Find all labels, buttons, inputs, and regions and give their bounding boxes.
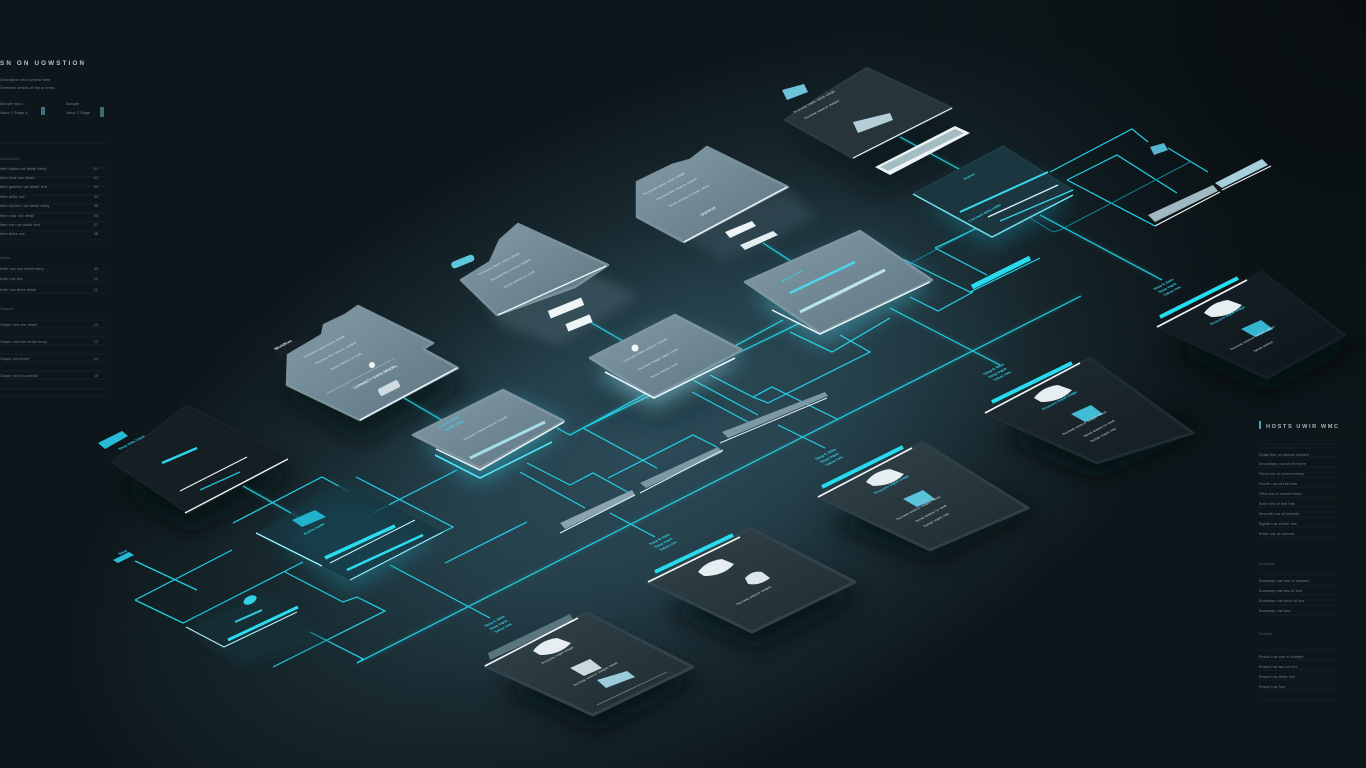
panel: upper left light card <box>272 306 458 420</box>
right text column: Fourth row of text line <box>1259 482 1297 486</box>
right text column: Result row one of content <box>1259 655 1304 659</box>
panel: card fourth: Review source output value <box>1061 410 1108 435</box>
left text column: Sample <box>66 102 79 106</box>
right text column: Summary <box>1259 562 1275 566</box>
left text column: Item beta row detail <box>0 176 35 180</box>
panel: card bottom: Step A data <box>482 615 507 627</box>
panel: top dark card: Review source output <box>803 99 841 119</box>
panel: glowing card three <box>745 231 932 345</box>
panel: top dark card: Process input value stage <box>792 90 836 113</box>
panel: card fourth: Step D data <box>981 362 1006 375</box>
panel: teal outlined card <box>256 482 443 590</box>
left text column: Overview details of the process <box>0 86 55 90</box>
panel: left dark card <box>98 405 290 513</box>
left text column: Item theta row <box>0 232 25 236</box>
panel: card second: Review source output <box>735 585 773 605</box>
left text column: Note row three detail <box>0 288 37 292</box>
panel: card bottom: Review source output value <box>572 661 619 686</box>
left text column: 11 <box>94 288 98 292</box>
panel: glowing card three: Active node <box>779 269 804 282</box>
panel: glowing card two: Review stage input value <box>637 348 680 370</box>
heading: right column: HOSTS UWIR WMC <box>1266 424 1340 430</box>
panel: teal card upper right: Active <box>961 172 977 180</box>
panel: upper light card: Review the source output <box>655 177 699 200</box>
left text column: Sample input <box>0 102 23 106</box>
panel: upper light card <box>637 147 788 250</box>
left text column: Value 2 Stage <box>66 111 90 115</box>
panel: upper left light card: CONNECT DATA MODEL <box>351 364 399 389</box>
label tag: Workflow <box>272 339 294 350</box>
panel: card fourth: Process input stage <box>1040 390 1079 410</box>
right text column: Detail line of column content <box>1259 453 1309 457</box>
panel: upper middle light card: Review the source output <box>489 258 533 281</box>
panel: glowing card two: Connect data source model <box>622 338 669 362</box>
panel: card bottom: Value row <box>492 622 514 633</box>
panel: glowing card three: Connect data source model <box>827 276 874 300</box>
panel: card fifth: Send status <box>1252 341 1274 352</box>
left text column: 02 <box>94 176 98 180</box>
right text column: Result row three line <box>1259 675 1295 679</box>
panel: upper left light card: Review the source output <box>314 341 358 364</box>
panel: upper left light card: Process input value stage <box>302 335 346 358</box>
left text column: 13 <box>94 340 98 344</box>
panel: upper left light card: Send status to next <box>329 352 363 370</box>
panel: card fourth: Send status to next <box>1082 419 1116 437</box>
left text column: Item epsilon row detail entry <box>0 204 50 208</box>
left text column: Item alpha row detail entry <box>0 167 47 171</box>
panel: upper light card: Process input value stage <box>642 172 686 195</box>
right text column: Secondary row of text here <box>1259 462 1306 466</box>
panel: card fifth: Step input <box>1156 282 1179 293</box>
panel: card fourth: Detail input row <box>1089 427 1118 442</box>
heading: left column: SN ON UOWSTION <box>0 60 86 67</box>
panel: upper light card: Send status to next value <box>667 184 711 207</box>
left text column: 07 <box>94 223 98 227</box>
left text column: 14 <box>94 357 98 361</box>
right text column: Summary row two of text <box>1259 589 1302 593</box>
panel: card fifth <box>1151 272 1360 392</box>
right text column: Sixth row of text line <box>1259 502 1295 506</box>
shadows and lower layers of light cards <box>120 100 965 535</box>
panel: card third: Step C data <box>813 447 838 460</box>
left text column: 01 <box>94 167 98 171</box>
left text column: 08 <box>94 232 98 236</box>
panel: glowing card one: Active node <box>436 415 461 428</box>
left text column: 05 <box>94 204 98 208</box>
panel: card third: Value row <box>823 455 845 466</box>
panel: upper middle light card: Send status to next <box>502 270 536 288</box>
panel: card bottom: Step input <box>487 619 510 630</box>
panel: card third: Review source output value <box>895 495 942 520</box>
left text column: 15 <box>94 374 98 378</box>
right text column: Result row four <box>1259 685 1286 689</box>
panel: glowing card one: Detail step <box>442 419 465 431</box>
panel: card second: Step input <box>652 537 675 548</box>
panel: card third <box>813 442 1036 563</box>
right text column <box>1259 421 1340 700</box>
panel: card second <box>647 528 863 650</box>
label tag <box>272 335 310 357</box>
left text column: Item eta row detail text <box>0 223 40 227</box>
right text column: Result row two of text <box>1259 665 1297 669</box>
left text column: Note row one detail entry <box>0 267 44 271</box>
panel: glowing card two <box>590 315 742 410</box>
right text column: Summary row one of content <box>1259 579 1309 583</box>
panel: card fifth: Value row <box>1161 285 1183 296</box>
left text column <box>0 60 108 396</box>
panel: card second: Step B data <box>647 532 672 545</box>
left text column: Item zeta row detail <box>0 214 34 218</box>
panel: card fifth: Process input stage <box>1208 305 1247 325</box>
panel: card fourth <box>981 358 1203 480</box>
panel: teal card lower left: Step <box>116 549 129 555</box>
panel: card third: Step input <box>818 452 841 463</box>
left text column: Note row two <box>0 277 23 281</box>
left text column: Description text content here <box>0 78 50 82</box>
panel: glowing card two: Send status next <box>649 363 679 378</box>
left text column: Outputs <box>0 307 14 311</box>
panel: card fourth: Value row <box>991 370 1013 381</box>
right text column: Results <box>1259 632 1272 636</box>
panel: top dark card <box>782 68 970 175</box>
panel: glowing card one: Connect data source model <box>462 416 509 440</box>
panel: upper middle light card: Process input value stage <box>477 252 521 275</box>
panel: card fifth: Step E data <box>1151 278 1176 290</box>
right text column: Fifth row of content here <box>1259 492 1302 496</box>
panel: card third: Process input stage <box>872 474 911 494</box>
panel: card bottom: Process input stage <box>540 646 575 664</box>
right text column: Summary row three of line <box>1259 599 1305 603</box>
left text column: 03 <box>94 185 98 189</box>
left text column: 12 <box>94 323 98 327</box>
left text column: Notes <box>0 256 10 260</box>
left text column: Section list <box>0 157 19 161</box>
right text column: Summary row four <box>1259 609 1291 613</box>
panel: upper light card: OUTPUT <box>698 206 718 216</box>
panel: card bottom <box>482 613 700 733</box>
connector lines <box>135 129 1208 667</box>
panel: teal outlined card: Active node <box>301 522 326 535</box>
left text column: Output row three <box>0 357 29 361</box>
left text column: Item delta row <box>0 195 25 199</box>
right text column: Third row of content entry <box>1259 472 1304 476</box>
left text column: Value 1 Stage A <box>0 111 28 115</box>
panel: teal card upper right <box>913 146 1073 245</box>
left text column: Output row four detail <box>0 374 38 378</box>
panel: card third: Send status to next <box>914 504 948 522</box>
right text column: Eighth row of text line <box>1259 522 1297 526</box>
bar: center grey strips <box>560 392 828 533</box>
panel: card fourth: Step input <box>986 367 1009 378</box>
panel: left dark card: Step data input <box>116 434 147 450</box>
panel: card third: Detail input row <box>922 512 951 527</box>
panel: teal card lower left <box>113 549 330 665</box>
panel: glowing card one <box>413 390 564 482</box>
right text column: Seventh row of content <box>1259 512 1299 516</box>
left text column: 10 <box>94 277 98 281</box>
label tag <box>450 254 475 269</box>
left text column: 09 <box>94 267 98 271</box>
left text column: 06 <box>94 214 98 218</box>
left text column: Output row one detail <box>0 323 37 327</box>
bar: bright strips right <box>972 143 1271 287</box>
left text column: Item gamma row detail text <box>0 185 47 189</box>
right text column: Ninth row of content <box>1259 532 1294 536</box>
panel: card second: Value row <box>657 540 679 551</box>
panel: teal card upper right: Connect data node <box>966 203 1003 222</box>
left text column: 04 <box>94 195 98 199</box>
left text column: Output row two detail entry <box>0 340 47 344</box>
panel: card fifth: Review source output value <box>1229 325 1276 350</box>
panel: upper middle light card <box>450 224 608 332</box>
